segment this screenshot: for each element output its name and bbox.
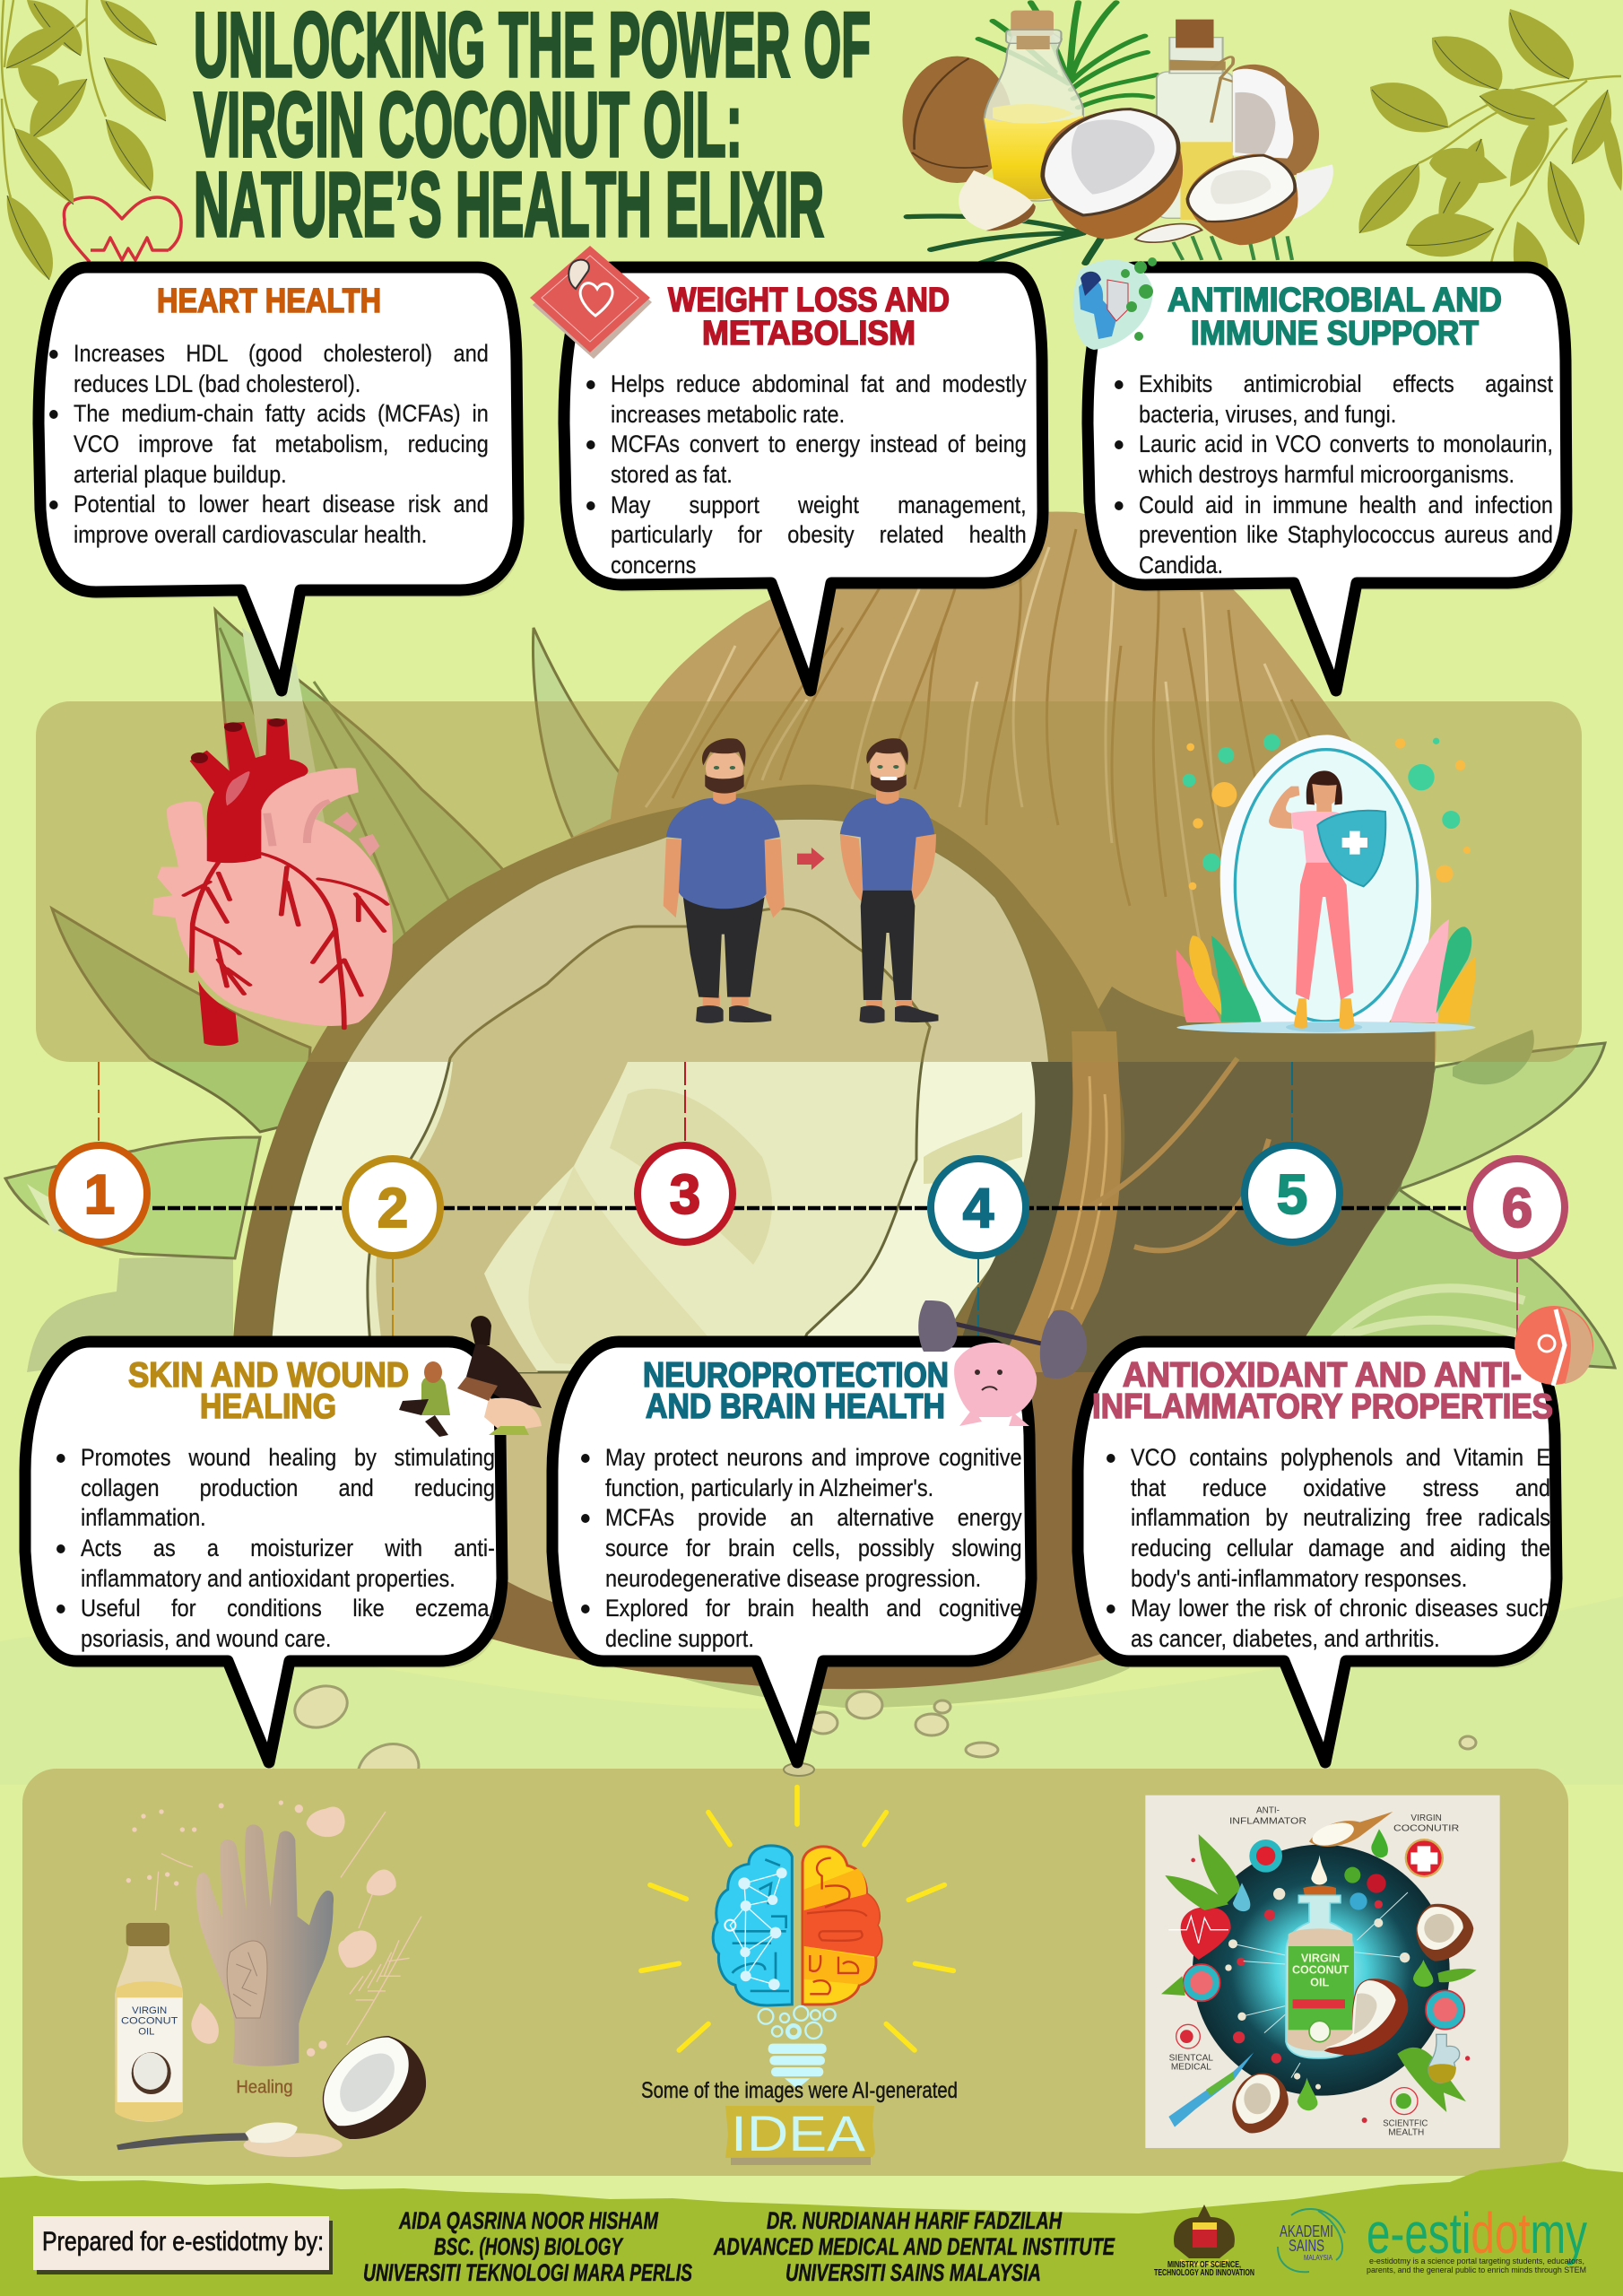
text block: antimicrobial points: Exhibits antimicrobial effects against (1139, 370, 1553, 397)
logo: ministry crest (1154, 2205, 1254, 2278)
icon: woman with shield and viruses (1073, 257, 1157, 350)
text block: antimicrobial points: which destroys harmful microorganisms. (1139, 461, 1515, 488)
text block: heart health points: improve overall cardiovascular health. (74, 521, 427, 548)
text block: weight loss points: Helps reduce abdominal fat and modestly (611, 370, 1027, 397)
credit: supervisor (713, 2207, 1115, 2286)
credit: supervisor: ADVANCED MEDICAL AND DENTAL INSTITUTE (713, 2233, 1115, 2260)
text block: antioxidant points: VCO contains polyphenols and Vitamin E (1131, 1444, 1550, 1471)
illustration: hand, oil bottle, coconut: Healing (236, 2076, 293, 2097)
credit: author (363, 2207, 692, 2286)
title: NATURE’S HEALTH ELIXIR (194, 153, 824, 256)
logo: e-estidotmy: parents, and the general public to enrich minds through STEM (1367, 2266, 1586, 2274)
number 3: 3 (670, 1164, 700, 1226)
illustration: hand, oil bottle, coconut (115, 1800, 426, 2157)
text block: neuroprotection points: MCFAs provide an alternative energy (605, 1504, 1022, 1531)
text block: skin and wound points: collagen production and reducing (81, 1474, 495, 1501)
text block: heart health points: VCO improve fat metabolism, reducing (74, 430, 489, 457)
illustration: AI coconut oil poster: SIENTCAL (1169, 2053, 1213, 2063)
text block: antioxidant points: as cancer, diabetes, and arthritis. (1131, 1625, 1440, 1652)
number 6 (1470, 1159, 1565, 1256)
lower olive band (22, 1769, 1568, 2176)
panel: antimicrobial and immune support (1088, 267, 1571, 698)
panel: weight loss and metabolism (564, 267, 1047, 698)
text block: weight loss points: increases metabolic rate. (611, 401, 845, 428)
icon: adult tending child's wound (399, 1316, 542, 1437)
coconut: husk, rim and flesh (206, 511, 1436, 1689)
number 3 (638, 1145, 733, 1242)
text block: antimicrobial points: Lauric acid in VCO converts to monolaurin, (1139, 430, 1553, 457)
number 6: 6 (1502, 1178, 1532, 1239)
text block: skin and wound points: Acts as a moisturizer with anti- (81, 1535, 495, 1561)
illustration: AI coconut oil poster: VIRGIN (1301, 1952, 1340, 1964)
connector lines and timeline (99, 1062, 1517, 1345)
text block: skin and wound points: Promotes wound healing by stimulating (81, 1444, 495, 1471)
panel: weight loss and metabolism: METABOLISM (702, 315, 916, 352)
number 5 (1245, 1145, 1340, 1242)
panel: skin and wound healing: SKIN AND WOUND (128, 1356, 409, 1395)
panel: skin and wound healing: HEALING (200, 1387, 336, 1426)
illustration: AI coconut oil poster: INFLAMMATOR (1229, 1816, 1306, 1826)
number 4: 4 (963, 1178, 994, 1239)
illustration: hand, oil bottle, coconut: OIL (138, 2027, 154, 2038)
text block: antimicrobial points: Candida. (1139, 552, 1223, 578)
text block: heart health points: reduces LDL (bad cholesterol). (74, 370, 360, 397)
illustration: brain light bulb (641, 1787, 953, 2089)
illustration: woman with shield in oval (1176, 734, 1476, 1033)
text block: weight loss points: May support weight management, (611, 491, 1027, 518)
text block: antioxidant points: May lower the risk of chronic diseases such (1131, 1595, 1550, 1622)
text block: antimicrobial points: prevention like Staphylococcus aureus and (1139, 521, 1553, 548)
panel: antioxidant and anti-inflammatory properties: INFLAMMATORY PROPERTIES (1092, 1387, 1553, 1426)
illustration: AI coconut oil poster: MEDICAL (1171, 2062, 1211, 2072)
title: VIRGIN COCONUT OIL: (194, 74, 742, 176)
credit box: prepared for e-estidotmy (33, 2216, 333, 2274)
number 1 (52, 1145, 147, 1242)
text block: antimicrobial points (1115, 370, 1553, 578)
text block: antimicrobial points: Could aid in immune health and infection (1139, 491, 1553, 518)
illustration: hand, oil bottle, coconut: COCONUT (121, 2016, 178, 2027)
illustration: hand, oil bottle, coconut: VIRGIN (132, 2005, 167, 2016)
text block: heart health points: Potential to lower heart disease risk and (74, 491, 489, 517)
illustration: AI coconut oil poster: MEALTH (1388, 2128, 1424, 2138)
panel: weight loss and metabolism: WEIGHT LOSS AND (668, 282, 950, 319)
logo: ministry crest: TECHNOLOGY AND INNOVATION (1154, 2268, 1254, 2278)
text block: weight loss points: concerns (611, 552, 696, 578)
text block: heart health points: The medium-chain fatty acids (MCFAs) in (74, 400, 489, 427)
credit: supervisor: DR. NURDIANAH HARIF FADZILAH (767, 2207, 1062, 2234)
text block: antioxidant points: that reduce oxidative stress and (1131, 1474, 1550, 1501)
text block: heart health points (49, 340, 489, 548)
backdrop leaves behind the coconut (5, 610, 1615, 1368)
panel: heart health: HEART HEALTH (157, 283, 381, 320)
text block: skin and wound points: inflammation. (81, 1504, 206, 1531)
number 1: 1 (84, 1164, 115, 1226)
logo: e-estidotmy: e-estidotmy (1367, 2201, 1587, 2266)
credit: author: BSC. (HONS) BIOLOGY (434, 2233, 624, 2260)
illustration: AI coconut oil poster: ANTI- (1256, 1806, 1280, 1816)
stones on the ground (289, 1679, 1476, 1806)
text block: neuroprotection points: function, particularly in Alzheimer's. (605, 1474, 933, 1501)
logo: e-estidotmy: e-estidotmy is a science portal targeting students, educators, (1369, 2257, 1584, 2266)
credit: author: UNIVERSITI TEKNOLOGI MARA PERLIS (363, 2259, 692, 2286)
illustration: AI coconut oil poster: SCIENTFIC (1383, 2119, 1428, 2129)
number 4 (931, 1159, 1026, 1256)
coconuts, bottles and palm leaves cluster (902, 3, 1333, 263)
upper olive band (36, 701, 1582, 1062)
icon: inflamed knee (1515, 1306, 1593, 1386)
icon: weight scale with heart (530, 246, 652, 359)
text block: weight loss points: particularly for obesity related health (611, 521, 1027, 548)
panel: antioxidant and anti-inflammatory properties: ANTIOXIDANT AND ANTI- (1123, 1356, 1522, 1395)
panel: antimicrobial and immune support: IMMUNE SUPPORT (1191, 315, 1479, 352)
illustration: man before and after weight loss (664, 738, 938, 1023)
text block: skin and wound points (56, 1444, 495, 1652)
number 2: 2 (378, 1178, 408, 1239)
illustration: AI coconut oil poster (1145, 1796, 1500, 2148)
illustration: anatomical heart (152, 718, 393, 1046)
panel: neuroprotection and brain health: NEUROPROTECTION (643, 1356, 949, 1395)
panel: skin and wound healing (25, 1342, 507, 1770)
logo: Akademi Sains Malaysia: AKADEMI (1280, 2222, 1333, 2240)
text block: antioxidant points: body's anti-inflammatory responses. (1131, 1565, 1467, 1592)
text block: neuroprotection points: source for brain cells, possibly slowing (605, 1535, 1022, 1561)
icon: red heartbeat outline (64, 197, 181, 262)
text block: weight loss points: stored as fat. (611, 461, 733, 488)
text block: weight loss points: MCFAs convert to energy instead of being (611, 430, 1027, 457)
logo: Akademi Sains Malaysia: SAINS (1289, 2237, 1324, 2255)
text block: antioxidant points: inflammation by neutralizing free radicals (1131, 1504, 1550, 1531)
text block: neuroprotection points (581, 1444, 1022, 1652)
icon: brain lifting barbell (918, 1300, 1087, 1426)
text block: heart health points: arterial plaque buildup. (74, 461, 287, 488)
note: images were AI-generated: Some of the images were AI-generated (641, 2078, 958, 2103)
logo: ministry crest: MINISTRY OF SCIENCE, (1167, 2260, 1241, 2270)
credit: author: AIDA QASRINA NOOR HISHAM (398, 2207, 658, 2234)
panel: antimicrobial and immune support: ANTIMICROBIAL AND (1167, 282, 1502, 319)
logo: Akademi Sains Malaysia: MALAYSIA (1304, 2254, 1333, 2262)
title (194, 0, 871, 256)
text block: skin and wound points: Useful for conditions like eczema, (81, 1595, 495, 1622)
text block: weight loss points (586, 370, 1027, 578)
number 2 (345, 1159, 440, 1256)
IDEA tag: IDEA (731, 2105, 866, 2161)
panel: neuroprotection and brain health: AND BRAIN HEALTH (646, 1387, 945, 1426)
logo: Akademi Sains Malaysia (1278, 2209, 1345, 2272)
stone overlapping lower band (784, 1763, 814, 1776)
footer grass strip (0, 2161, 1623, 2296)
credit box: prepared for e-estidotmy: Prepared for e-estidotmy by: (42, 2227, 324, 2257)
illustration: AI coconut oil poster: COCONUTIR (1393, 1824, 1459, 1834)
text block: antioxidant points: reducing cellular damage and aiding the (1131, 1535, 1550, 1561)
illustration: AI coconut oil poster: VIRGIN (1410, 1813, 1442, 1823)
panel: neuroprotection and brain health (552, 1342, 1036, 1770)
panel: heart health (39, 267, 523, 698)
credit: supervisor: UNIVERSITI SAINS MALAYSIA (785, 2259, 1041, 2286)
panel: antioxidant and anti-inflammatory properties (1078, 1342, 1561, 1770)
text block: neuroprotection points: neurodegenerative disease progression. (605, 1565, 981, 1592)
text block: neuroprotection points: May protect neurons and improve cognitive (605, 1444, 1022, 1471)
illustration: AI coconut oil poster: OIL (1310, 1977, 1329, 1989)
text block: heart health points: Increases HDL (good cholesterol) and (74, 340, 489, 367)
text block: antimicrobial points: bacteria, viruses, and fungi. (1139, 401, 1396, 428)
text block: neuroprotection points: Explored for brain health and cognitive (605, 1595, 1022, 1622)
text block: skin and wound points: psoriasis, and wound care. (81, 1625, 331, 1652)
decorative leaves: top left branch (2, 0, 166, 280)
text block: neuroprotection points: decline support. (605, 1625, 754, 1652)
text block: antioxidant points (1107, 1444, 1550, 1652)
number 5: 5 (1277, 1164, 1307, 1226)
illustration: AI coconut oil poster: COCONUT (1292, 1964, 1350, 1977)
decorative leaves: top right branch (1358, 9, 1622, 278)
text block: skin and wound points: inflammatory and antioxidant properties. (81, 1565, 456, 1592)
